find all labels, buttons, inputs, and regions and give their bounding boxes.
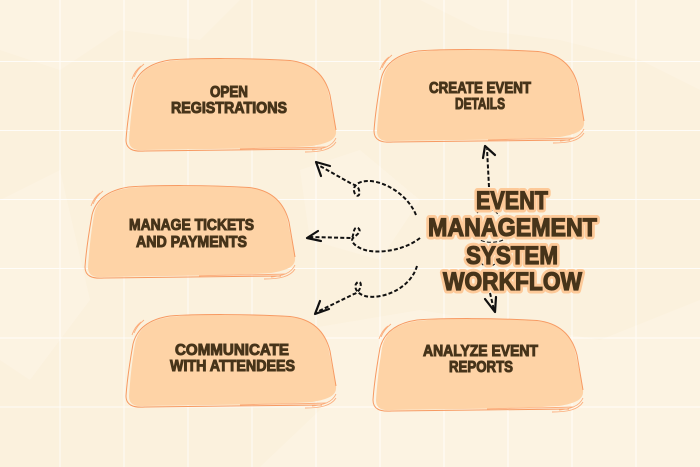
label: open registrations: OPEN — [210, 84, 248, 101]
label: open registrations: REGISTRATIONS — [171, 100, 287, 117]
title: WORKFLOW — [443, 268, 582, 296]
title: MANAGEMENT — [428, 214, 597, 242]
panel: open registrations — [126, 59, 336, 152]
label: manage tickets and payments: AND PAYMENTS — [136, 234, 247, 251]
dashed loops behind title — [477, 210, 503, 267]
title: EVENT — [476, 187, 548, 215]
title: EVENT — [476, 187, 548, 215]
arrow: to create event details — [483, 146, 495, 187]
arrow: to manage tickets — [307, 228, 420, 252]
label: communicate with attendees: WITH ATTENDEES — [170, 358, 295, 375]
label: manage tickets and payments — [129, 217, 254, 251]
panel: create event details — [374, 50, 584, 143]
title: MANAGEMENT — [428, 214, 597, 242]
label: create event details — [429, 80, 531, 113]
arrow: to communicate — [315, 266, 417, 314]
title: SYSTEM — [466, 242, 558, 270]
label: manage tickets and payments: MANAGE TICKETS — [129, 217, 254, 234]
label: create event details: DETAILS — [455, 96, 505, 113]
label: open registrations — [171, 84, 287, 117]
arrow: to analyze event reports — [485, 293, 496, 312]
label: communicate with attendees: COMMUNICATE — [175, 342, 289, 359]
panel: manage tickets and payments — [85, 186, 295, 279]
panel: communicate with attendees — [126, 315, 336, 408]
label: create event details: CREATE EVENT — [429, 80, 531, 97]
label: communicate with attendees — [170, 342, 295, 375]
arrow: to open registrations — [316, 162, 416, 215]
panel: analyze event reports — [373, 319, 583, 412]
label: analyze event reports: REPORTS — [449, 359, 513, 376]
title — [428, 187, 597, 296]
title: SYSTEM — [466, 242, 558, 270]
title: WORKFLOW — [443, 268, 582, 296]
label: analyze event reports: ANALYZE EVENT — [423, 343, 538, 360]
label: analyze event reports — [423, 343, 538, 376]
